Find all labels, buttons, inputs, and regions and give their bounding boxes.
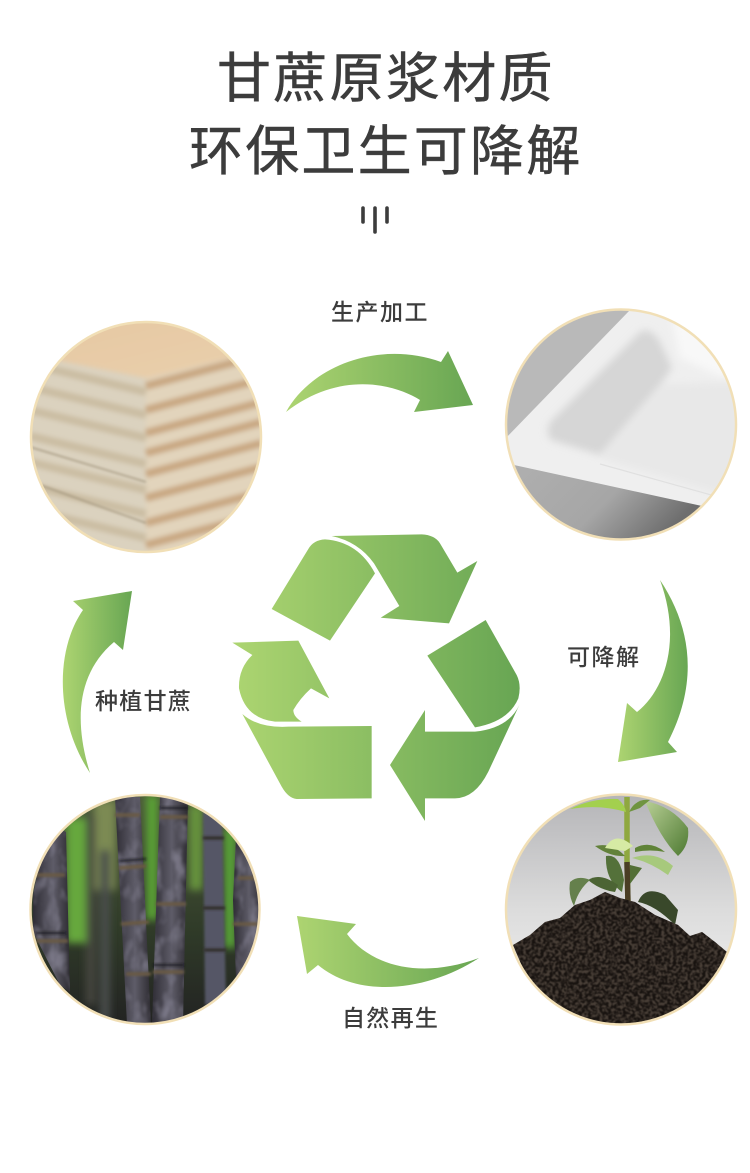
bark mottling bbox=[33, 797, 262, 1024]
label: 种植甘蔗: 种植甘蔗 bbox=[95, 688, 192, 714]
arrow: right bbox=[618, 580, 688, 762]
recycle arrow: top right bbox=[332, 534, 477, 623]
centre stalk A bbox=[115, 797, 151, 1024]
plant stem bbox=[627, 797, 628, 905]
left stalk bbox=[33, 830, 70, 992]
recycle segment: bottom left bbox=[242, 714, 372, 799]
title: 甘蔗原浆材质 bbox=[217, 49, 555, 109]
recycle segment: top left bbox=[272, 539, 375, 641]
decorative tick marks bbox=[363, 208, 387, 232]
recycling symbol bbox=[232, 534, 520, 821]
recycle arrow: left bbox=[232, 641, 329, 722]
arrow: left bbox=[63, 591, 132, 773]
shadowed surface above plate bbox=[507, 310, 629, 436]
label: 自然再生: 自然再生 bbox=[342, 1005, 439, 1031]
arrow: top bbox=[286, 351, 473, 412]
recycle segment: right bbox=[427, 620, 520, 727]
photo: sugarcane stalks bbox=[28, 793, 262, 1027]
plate well bbox=[546, 328, 720, 456]
leaves bbox=[570, 799, 688, 925]
title bbox=[189, 49, 582, 182]
title: 环保卫生可降解 bbox=[189, 122, 582, 182]
shaded surface below plate bbox=[514, 465, 701, 538]
recycle arrow: bottom right bbox=[390, 705, 519, 821]
label: 可降解: 可降解 bbox=[567, 644, 640, 670]
label: 生产加工: 生产加工 bbox=[331, 299, 429, 325]
arrow: bottom bbox=[297, 916, 479, 987]
soil mound bbox=[513, 892, 727, 1030]
cane nodes bbox=[34, 815, 258, 974]
far stalk bbox=[203, 812, 226, 1005]
photo: white bagasse plate bbox=[503, 307, 740, 545]
photo: plywood layers bbox=[28, 320, 264, 556]
photo: seedling in soil bbox=[503, 793, 739, 1030]
right stalk bbox=[233, 842, 258, 976]
centre stalk B bbox=[152, 797, 188, 1024]
